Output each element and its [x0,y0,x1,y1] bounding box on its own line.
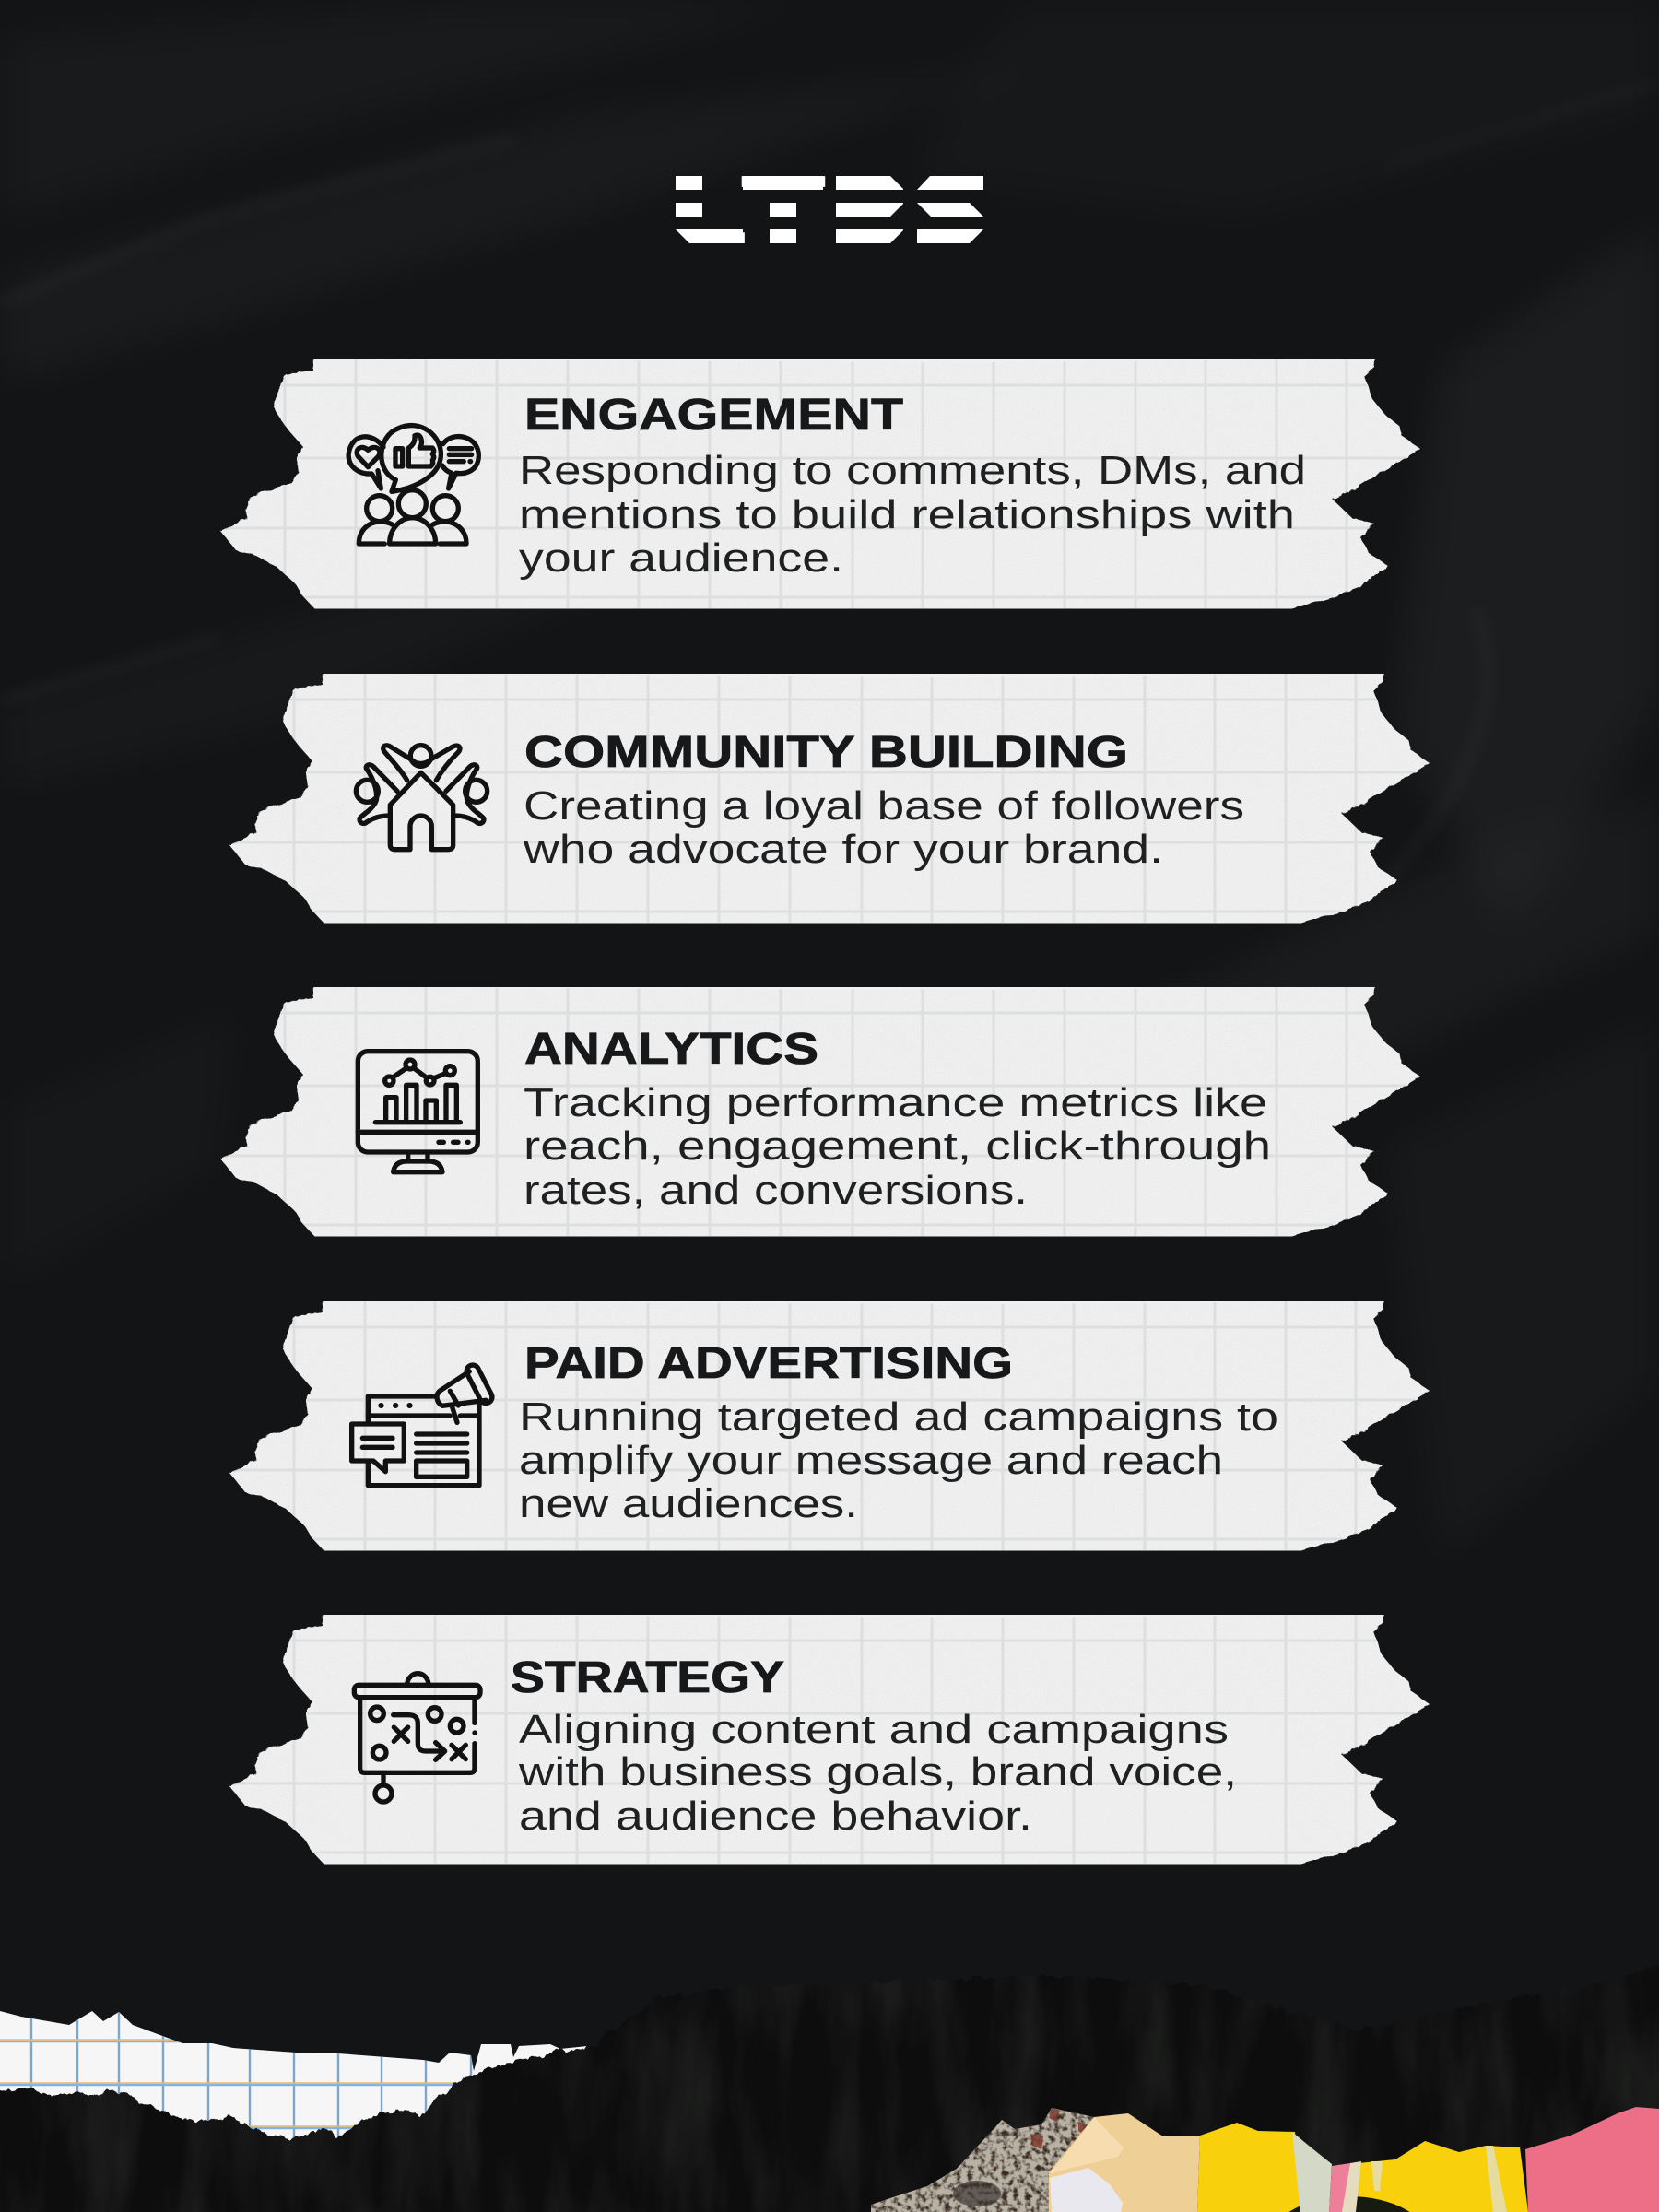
text block: engagement description: your audience. [519,535,843,581]
torn grid paper, bottom left [0,2011,586,2140]
logo: LTBS [676,176,983,243]
icon: monitor with chart [358,1052,477,1172]
heading: analytics: ANALYTICS [524,1025,818,1074]
logo: LTBS: S [912,156,988,265]
text block: paid advertising description: amplify your message and reach [519,1438,1223,1483]
torn collage posters, bottom right [871,2107,1659,2212]
dark stain [953,2181,1001,2206]
logo: LTBS: L [666,156,748,265]
rust stains [1030,2108,1086,2149]
logo: LTBS: B [829,156,909,265]
text block: paid advertising description: Running targeted ad campaigns to [519,1394,1278,1440]
panel: analytics [212,973,1429,1250]
icon: browser with megaphone [352,1363,494,1486]
heading: paid advertising: PAID ADVERTISING [524,1339,1013,1388]
black circle [1271,2196,1428,2212]
pale grey strip [1292,2132,1332,2212]
text block: strategy description: and audience behavior. [519,1794,1032,1839]
text block: engagement description [519,448,1306,581]
icon: crowd with speech bubbles [348,426,478,544]
text block: paid advertising description [519,1394,1278,1526]
text block: analytics description: rates, and conversions. [524,1168,1028,1213]
text block: analytics description: Tracking performance metrics like [524,1080,1267,1125]
text block: community building description: who advocate for your brand. [523,827,1163,872]
text block: analytics description: reach, engagement, click-through [524,1124,1271,1169]
text block: analytics description [524,1080,1271,1213]
pale stripes on yellow [1371,2146,1507,2212]
pink paper [1525,2107,1659,2212]
icon: presentation board with game plan [354,1674,480,1802]
text block: community building description [523,783,1244,872]
text block: paid advertising description: new audiences. [519,1481,858,1526]
text block: strategy description: with business goals, brand voice, [518,1749,1237,1794]
grey stone paper [871,2108,1094,2212]
white patch [1050,2168,1123,2212]
yellow paper right [1355,2141,1528,2212]
beige strip [1342,2161,1361,2212]
panel: paid advertising [221,1288,1438,1564]
panel: strategy [221,1601,1438,1877]
text block: strategy description [518,1707,1237,1839]
logo: LTBS: T [740,155,827,264]
yellow paper [1197,2123,1300,2212]
heading: engagement: ENGAGEMENT [524,391,903,440]
panel: engagement [212,346,1429,622]
text block: engagement description: mentions to build relationships with [519,492,1295,537]
icon: house with people [356,746,488,850]
torn dark paper layer [0,1963,1659,2212]
panel: community building [221,660,1438,936]
heading: community building: COMMUNITY BUILDING [524,728,1128,777]
text block: strategy description: Aligning content and campaigns [519,1707,1229,1752]
beige flap [1050,2117,1124,2173]
text block: engagement description: Responding to comments, DMs, and [519,448,1306,493]
beige paper [1049,2113,1200,2212]
heading: strategy: STRATEGY [511,1653,784,1702]
text block: community building description: Creating a loyal base of followers [524,783,1244,829]
pink strip [1329,2163,1350,2212]
